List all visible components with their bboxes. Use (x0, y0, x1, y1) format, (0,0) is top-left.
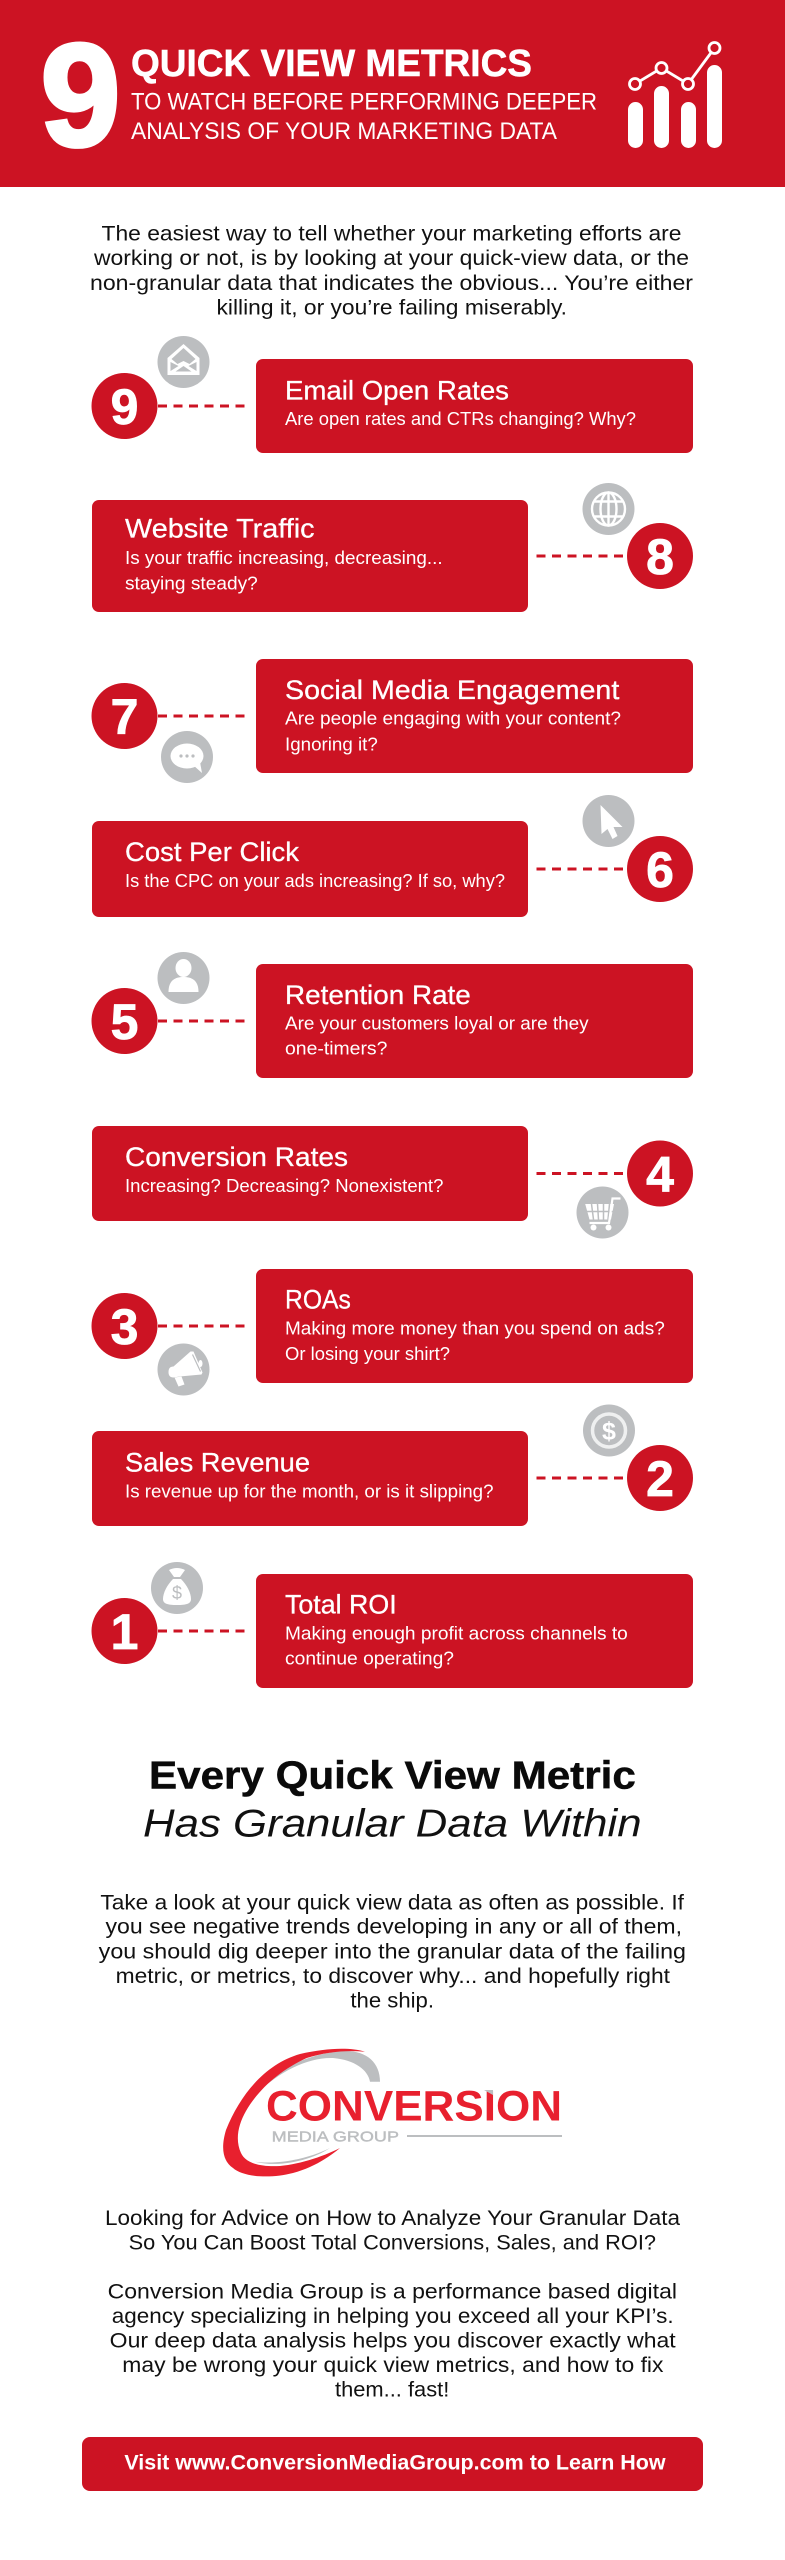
number badge 2 (627, 1445, 693, 1511)
card: Are people engaging with your content? (285, 709, 621, 729)
button: visit website (82, 2437, 703, 2491)
metric 7: Social Media Engagement (92, 659, 693, 783)
connector (536, 1172, 627, 1175)
icon: cursor (582, 795, 634, 847)
card: Ignoring it? (285, 734, 378, 754)
logo: Conversion Media Group (223, 2049, 562, 2176)
metric 5: Retention Rate (92, 952, 693, 1078)
metric 1: Total ROI (92, 1562, 693, 1688)
logo subline: MEDIA GROUP (272, 2129, 399, 2146)
card (256, 1574, 693, 1688)
call-to-action question (105, 2207, 680, 2255)
card: Is your traffic increasing, decreasing... (125, 548, 443, 568)
number badge 7 (92, 683, 158, 749)
connector (536, 868, 627, 870)
card: Social Media Engagement (285, 675, 620, 705)
card (256, 359, 693, 453)
call-to-action question: Looking for Advice on How to Analyze Your Granular Data (105, 2207, 680, 2230)
metric 9: Email Open Rates (92, 336, 693, 453)
number badge 8: 8 (646, 529, 674, 585)
button: visit website: Visit www.ConversionMediaGroup.com to Learn How (124, 2451, 666, 2474)
connector (158, 1020, 249, 1022)
card: Is the CPC on your ads increasing? If so, why? (125, 871, 505, 891)
number badge 4: 4 (646, 1146, 674, 1202)
connector (158, 404, 249, 408)
card: Retention Rate (285, 980, 471, 1010)
metric 4: Conversion Rates (92, 1126, 693, 1238)
section heading: Every Quick View Metric (149, 1754, 636, 1797)
icon: globe (582, 483, 634, 535)
body paragraph (99, 1891, 686, 2012)
icon: megaphone (158, 1344, 210, 1396)
number badge 3: 3 (111, 1299, 138, 1355)
card: Making enough profit across channels to (285, 1623, 628, 1643)
intro text: killing it, or you’re failing miserably. (216, 296, 567, 319)
number badge 6: 6 (646, 842, 674, 898)
connector (536, 1476, 627, 1480)
agency description: may be wrong your quick view metrics, and how to fix (122, 2354, 664, 2377)
connector (158, 714, 249, 718)
section heading (143, 1754, 642, 1846)
subtitle: ANALYSIS OF YOUR MARKETING DATA (131, 118, 557, 145)
card: Sales Revenue (125, 1448, 310, 1478)
agency description: agency specializing in helping you exceed all your KPI’s. (112, 2305, 674, 2328)
icon: envelope (158, 336, 210, 388)
icon: chat bubble (161, 731, 213, 783)
agency description: Conversion Media Group is a performance based digital (108, 2281, 677, 2304)
card (256, 1269, 693, 1383)
intro text: The easiest way to tell whether your marketing efforts are (102, 223, 682, 246)
body paragraph: you should dig deeper into the granular data of the failing (99, 1940, 686, 1963)
number badge 6 (627, 836, 693, 902)
connector (536, 554, 627, 558)
number badge 5: 5 (111, 994, 138, 1050)
icon: dollar coin (583, 1404, 635, 1456)
icon: dollar coin: $ (602, 1418, 616, 1446)
icon: shopping cart (576, 1186, 628, 1238)
card (256, 659, 693, 773)
card: Increasing? Decreasing? Nonexistent? (125, 1176, 443, 1196)
subtitle (131, 88, 597, 145)
card: continue operating? (285, 1649, 454, 1669)
card: Making more money than you spend on ads? (285, 1318, 665, 1338)
card (92, 1431, 528, 1526)
card: one-timers? (285, 1039, 387, 1059)
card: Website Traffic (125, 514, 315, 544)
icon: money bag: $ (172, 1583, 182, 1603)
card: Cost Per Click (125, 837, 300, 867)
card: Conversion Rates (125, 1142, 348, 1172)
card: Total ROI (285, 1589, 397, 1619)
body paragraph: metric, or metrics, to discover why... and hopefully right (116, 1965, 670, 1988)
number badge 9: 9 (111, 379, 138, 435)
intro text (90, 223, 693, 319)
body paragraph: Take a look at your quick view data as often as possible. If (100, 1891, 684, 1914)
card: Are open rates and CTRs changing? Why? (285, 409, 636, 429)
number badge 1: 1 (111, 1604, 138, 1660)
card (92, 500, 528, 612)
card: ROAs (285, 1285, 351, 1315)
intro text: working or not, is by looking at your quick-view data, or the (93, 247, 689, 270)
number badge 3 (92, 1293, 158, 1359)
metric 6: Cost Per Click (92, 795, 693, 917)
card: Is revenue up for the month, or is it slipping? (125, 1482, 494, 1502)
number badge 7: 7 (111, 689, 138, 745)
number badge 9 (92, 373, 158, 439)
big number 9: 9 (40, 14, 120, 176)
number badge 2: 2 (646, 1451, 674, 1507)
title: QUICK VIEW METRICS (131, 43, 532, 85)
section heading: Has Granular Data Within (143, 1803, 642, 1846)
body paragraph: you see negative trends developing in any or all of them, (106, 1916, 682, 1939)
metric 3: ROAs (92, 1269, 693, 1396)
subtitle: TO WATCH BEFORE PERFORMING DEEPER (131, 88, 597, 116)
agency description: them... fast! (335, 2379, 449, 2402)
number badge 1 (92, 1598, 158, 1664)
agency description (108, 2281, 677, 2402)
metric 8: Website Traffic (92, 483, 693, 612)
intro text: non-granular data that indicates the obvious... You’re either (90, 272, 693, 295)
logo wordmark: CONVERSION (266, 2083, 562, 2131)
number badge 8 (627, 523, 693, 589)
metric 2: Sales Revenue (92, 1404, 693, 1526)
card (256, 964, 693, 1078)
card (92, 821, 528, 917)
body paragraph: the ship. (350, 1989, 434, 2012)
card: Or losing your shirt? (285, 1344, 450, 1364)
card: Are your customers loyal or are they (285, 1014, 589, 1034)
card: Email Open Rates (285, 375, 509, 405)
icon: person (158, 952, 210, 1004)
header banner (0, 0, 785, 187)
number badge 4 (627, 1140, 693, 1206)
call-to-action question: So You Can Boost Total Conversions, Sales, and ROI? (129, 2232, 656, 2255)
agency description: Our deep data analysis helps you discover exactly what (110, 2330, 676, 2353)
connector (158, 1324, 249, 1328)
number badge 5 (92, 988, 158, 1054)
icon: money bag (151, 1562, 203, 1614)
card: staying steady? (125, 573, 258, 593)
connector (158, 1630, 249, 1632)
logo swoosh (223, 2049, 380, 2176)
icon: bar and line chart (628, 42, 722, 148)
card (92, 1126, 528, 1221)
